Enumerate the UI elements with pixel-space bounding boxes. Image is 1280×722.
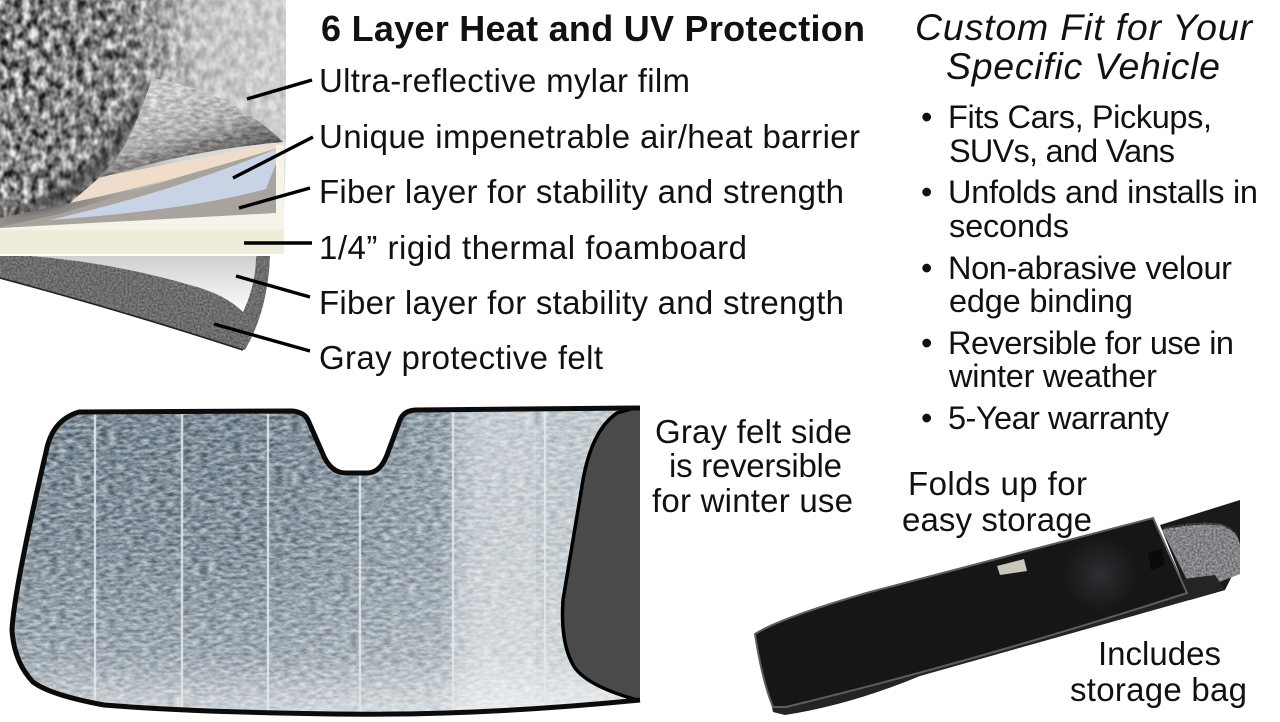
bullet: unfolds: • bbox=[921, 174, 932, 210]
bullet: fits: • bbox=[921, 99, 932, 135]
layer: curled foil underside bbox=[100, 78, 283, 178]
layer: gray protective felt bbox=[0, 256, 270, 350]
edge: felt lower edge bbox=[0, 278, 243, 350]
bullet: fits: Fits Cars, Pickups, bbox=[948, 99, 1212, 135]
caption: folds up: easy storage bbox=[902, 501, 1092, 538]
texture: felt weave bbox=[1162, 522, 1240, 580]
shade: vertical seams bbox=[95, 405, 545, 712]
image: windshield sun shade bbox=[0, 400, 645, 720]
bag: folded shade felt bbox=[1162, 525, 1240, 592]
bullet: velour bbox=[921, 250, 1232, 319]
texture: felt grain bbox=[0, 256, 272, 352]
pointer lines bbox=[214, 80, 313, 351]
shadow: under the curled foil bbox=[0, 80, 150, 218]
shade: bright panel bbox=[454, 412, 536, 684]
label: barrier: Unique impenetrable air/heat barrier bbox=[319, 118, 860, 155]
bag: black flap behind bbox=[1160, 500, 1240, 600]
bullet: warranty: 5-Year warranty bbox=[948, 400, 1170, 436]
bullet: warranty: • bbox=[921, 400, 932, 436]
shade: silver base bbox=[14, 410, 626, 712]
bullet: reversible: winter weather bbox=[948, 358, 1157, 394]
label: fiber lower: Fiber layer for stability and strength bbox=[319, 284, 844, 321]
layer: peach underside band bbox=[70, 142, 283, 203]
bullet: velour: edge binding bbox=[949, 283, 1133, 319]
layer: foamboard top bbox=[0, 145, 284, 231]
label: fiber upper: Fiber layer for stability and strength bbox=[319, 173, 844, 210]
caption: storage bag: Includes bbox=[1098, 635, 1221, 672]
shade: bright lower sheen bbox=[14, 480, 627, 712]
label: felt: Gray protective felt bbox=[319, 339, 603, 376]
heading: layers: 6 Layer Heat and UV Protection bbox=[321, 8, 865, 49]
bullet: reversible: Reversible for use in bbox=[948, 325, 1234, 361]
bag: label patch bbox=[997, 559, 1027, 575]
bullet: fits: SUVs, and Vans bbox=[949, 133, 1175, 169]
shade: crinkle texture bbox=[14, 410, 624, 712]
heading: custom fit: Specific Vehicle bbox=[946, 45, 1220, 87]
heading: custom fit: Custom Fit for Your bbox=[915, 6, 1254, 48]
bullet: unfolds bbox=[921, 174, 1258, 244]
label: foamboard: 1/4” rigid thermal foamboard bbox=[319, 229, 747, 266]
layer: air and heat barrier bbox=[50, 146, 283, 220]
image: six-layer material cutaway bbox=[0, 0, 313, 352]
bullet: velour: Non-abrasive velour bbox=[948, 250, 1232, 286]
shade: gray felt reverse corner bbox=[562, 405, 645, 702]
heading: custom fit bbox=[915, 6, 1254, 87]
layer: lower white fiber bbox=[30, 256, 256, 312]
bullet: reversible: • bbox=[921, 325, 932, 361]
caption: gray felt side: is reversible bbox=[669, 447, 842, 484]
layer: foil top surface bbox=[0, 0, 286, 228]
bag: velcro tab bbox=[1148, 549, 1165, 570]
caption: storage bag bbox=[1070, 635, 1247, 708]
caption: folds up: Folds up for bbox=[908, 465, 1087, 502]
caption: gray felt side bbox=[652, 413, 853, 519]
caption: folds up bbox=[902, 465, 1092, 538]
layer: foamboard front bbox=[0, 230, 284, 254]
image: storage bag bbox=[755, 500, 1242, 715]
label: mylar: Ultra-reflective mylar film bbox=[319, 62, 690, 99]
layer labels bbox=[319, 62, 860, 376]
texture: curl grain bbox=[95, 75, 285, 180]
bullet: fits bbox=[921, 99, 1212, 169]
bullet: unfolds: seconds bbox=[949, 208, 1069, 244]
bag: body bbox=[755, 518, 1187, 707]
caption: gray felt side: for winter use bbox=[652, 482, 853, 519]
shade: black edge binding bbox=[12, 408, 640, 714]
layer: gray upper fiber bbox=[0, 145, 283, 227]
texture: foil bumps bbox=[0, 0, 286, 218]
bullet: velour: • bbox=[921, 250, 932, 286]
caption: storage bag: storage bag bbox=[1070, 671, 1247, 708]
bullet: reversible bbox=[921, 325, 1234, 394]
bag: underside bbox=[756, 575, 1225, 715]
bullet: unfolds: Unfolds and installs in bbox=[948, 174, 1258, 210]
caption: gray felt side: Gray felt side bbox=[655, 413, 852, 450]
feature bullet list bbox=[921, 99, 1258, 436]
